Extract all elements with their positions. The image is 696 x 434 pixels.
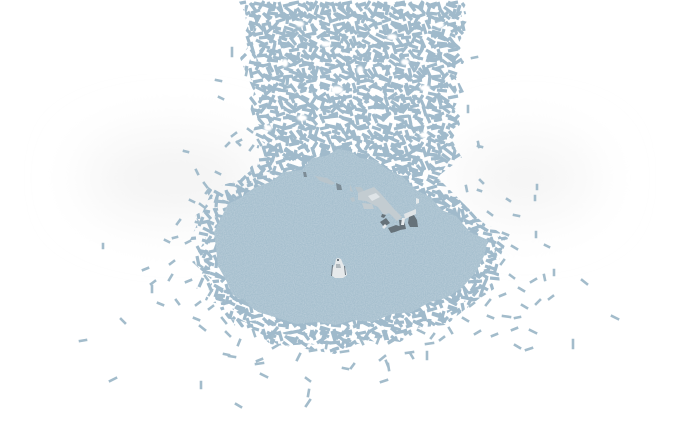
scattered sticks left [80,140,278,407]
stray falling sticks [216,24,479,150]
scattered sticks right [463,146,618,350]
solid particle pile [214,149,488,325]
scattered sticks bottom [297,328,452,406]
falling particle column [216,0,479,200]
small figure artifact [331,258,347,278]
background soft shadow [85,138,595,218]
particle pile fringe [190,132,508,354]
embedded arm artifact [303,172,419,233]
column gaps [264,21,444,138]
